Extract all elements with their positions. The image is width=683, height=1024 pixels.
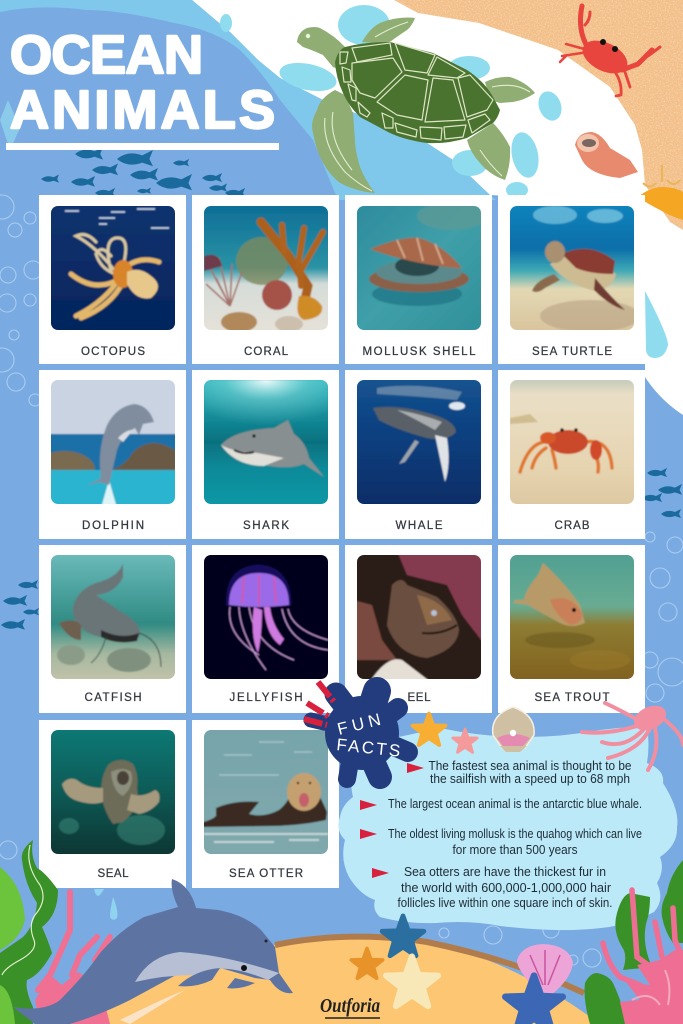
red crab illustration [560, 6, 660, 96]
fact 2: The largest ocean animal is the antarctic blue whale. [388, 797, 642, 811]
card: shark [192, 370, 339, 539]
fact 4: Sea otters are have the thickest fur in [404, 865, 606, 879]
fish left side [1, 580, 39, 630]
photo: whale [357, 380, 481, 504]
label: MOLLUSK SHELL [362, 346, 476, 358]
label: JELLYFISH [230, 692, 302, 704]
photo: shark [204, 380, 328, 504]
photo: crab [510, 380, 634, 504]
icon: pink starfish [453, 729, 477, 752]
photo: catfish [51, 555, 175, 679]
coral left [35, 892, 110, 1024]
photo: jellyfish [204, 555, 328, 679]
dolphin illustration [13, 879, 293, 1024]
icon: orange starfish [412, 714, 446, 745]
label: SHARK [243, 520, 289, 532]
flippers and head [297, 18, 535, 193]
flipper markings [325, 22, 530, 191]
label: SEA TROUT [534, 692, 610, 704]
fun facts panel [338, 726, 677, 930]
pink scallop shell [517, 944, 573, 1000]
label: EEL [408, 692, 431, 704]
card: mollusk shell [345, 195, 492, 364]
icon: clam with pearl [493, 707, 534, 752]
fun facts badge [304, 682, 408, 779]
sand corner [394, 0, 683, 230]
bottom sand mound [60, 937, 600, 1024]
icon: pink octopus [582, 701, 683, 770]
photo: sea turtle [510, 206, 634, 330]
card: sea turtle [498, 195, 645, 364]
label: SEAL [98, 868, 129, 880]
label: SEA OTTER [229, 868, 303, 880]
light blue splashes [220, 5, 565, 198]
fact 1: the sailfish with a speed up to 68 mph [430, 772, 630, 786]
fact 4 [372, 865, 612, 910]
title: ANIMALS [10, 80, 275, 140]
fact 1 [407, 759, 632, 786]
label: OCTOPUS [81, 346, 145, 358]
shell plates [340, 43, 493, 140]
seaweed and coral right [585, 860, 683, 1024]
photo: coral [204, 206, 328, 330]
photo: mollusk shell [357, 206, 481, 330]
label: CORAL [244, 346, 289, 358]
school of fish top [41, 147, 245, 197]
photo: dolphin [51, 380, 175, 504]
card: catfish [39, 545, 186, 713]
badge text: FACTS [336, 735, 401, 761]
fish right side [642, 468, 682, 518]
card: octopus [39, 195, 186, 364]
title underline [6, 143, 279, 150]
label: CRAB [554, 520, 590, 532]
fact 3: for more than 500 years [452, 843, 578, 857]
card: crab [498, 370, 645, 539]
card: sea otter [192, 720, 339, 888]
fact 3 [360, 827, 642, 857]
burst lines [304, 682, 339, 725]
fact 1: The fastest sea animal is thought to be [428, 759, 632, 773]
yellow scallop shell illustration [638, 165, 683, 220]
bubbles [0, 195, 683, 967]
label: SEA TURTLE [532, 346, 612, 358]
starfish bottom cream [386, 956, 438, 1006]
fact 4: the world with 600,000-1,000,000 hair [401, 881, 611, 895]
label: WHALE [396, 520, 443, 532]
seaweed left [0, 840, 58, 1024]
badge text: FUN [335, 710, 383, 739]
card: jellyfish [192, 545, 339, 713]
title: OCEAN [10, 25, 203, 85]
badge text [335, 710, 401, 761]
photo: eel [357, 555, 481, 679]
card: sea trout [498, 545, 645, 713]
turtle shell [335, 42, 500, 143]
card: eel [345, 545, 492, 713]
starfish bottom blue [382, 916, 424, 956]
fact 3: The oldest living mollusk is the quahog which can live [388, 827, 642, 841]
card: coral [192, 195, 339, 364]
brand logo: Outforia [320, 995, 380, 1017]
photo: sea trout [510, 555, 634, 679]
starfish bottom large blue [505, 976, 563, 1024]
title [10, 25, 275, 140]
big sea turtle illustration [297, 18, 535, 193]
photo: sea otter [204, 730, 328, 854]
fact 4: follicles live within one square inch of skin. [398, 896, 612, 910]
card: seal [39, 720, 186, 888]
photo: octopus [51, 206, 175, 330]
label: CATFISH [84, 692, 142, 704]
starfish bottom orange [351, 948, 383, 978]
photo: seal [51, 730, 175, 854]
card: dolphin [39, 370, 186, 539]
conch shell illustration [575, 132, 638, 178]
label: DOLPHIN [82, 520, 144, 532]
card: whale [345, 370, 492, 539]
